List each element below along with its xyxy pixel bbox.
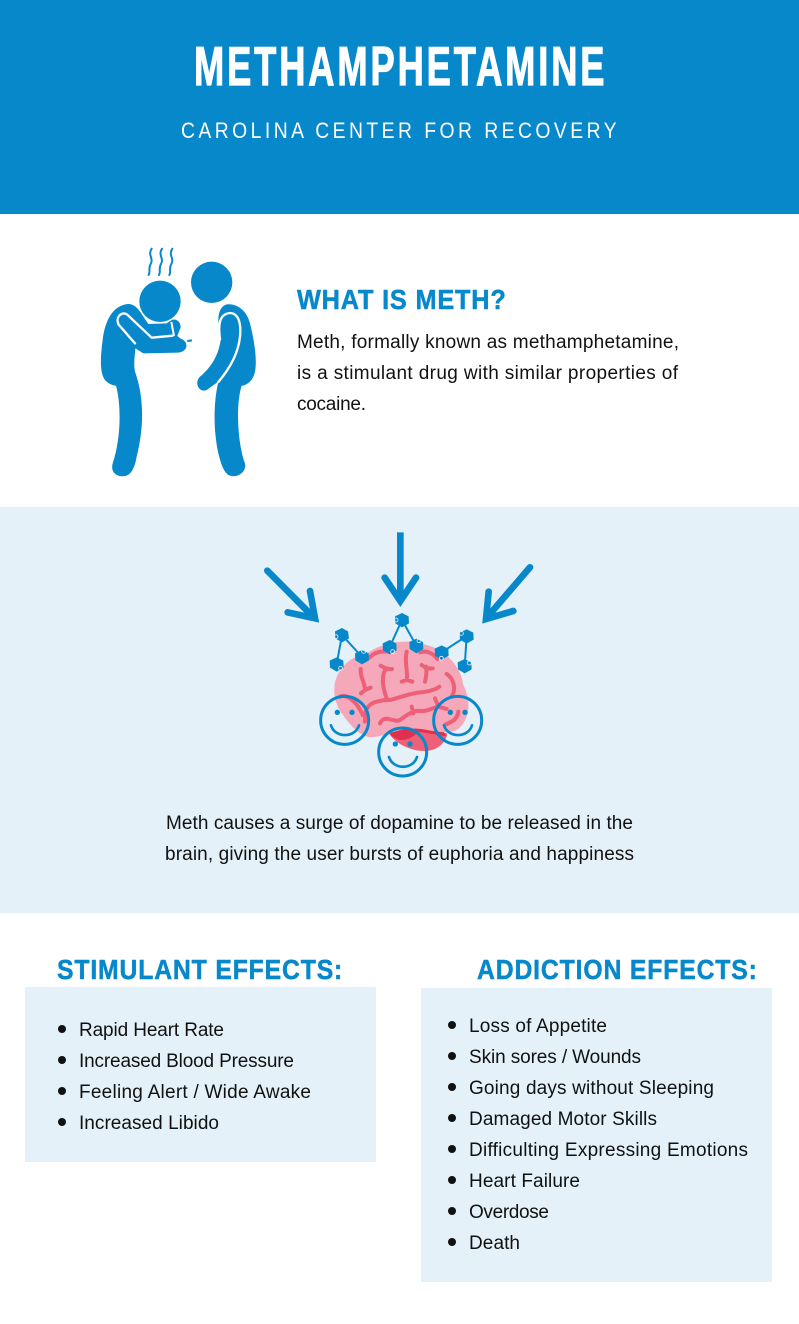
arrow: right bbox=[486, 567, 530, 619]
right person head bbox=[191, 262, 232, 303]
panel: addiction effects bbox=[421, 988, 772, 1282]
pipe bbox=[171, 322, 174, 336]
heading: stimulant effects: STIMULANT EFFECTS: bbox=[57, 954, 342, 985]
brain bbox=[334, 642, 469, 751]
left person body bbox=[101, 304, 186, 476]
heading: addiction effects: ADDICTION EFFECTS: bbox=[477, 954, 757, 985]
title: METHAMPHETAMINE bbox=[194, 35, 605, 97]
panel: addiction effects: Going days without Sleeping bbox=[469, 1078, 714, 1099]
panel: stimulant effects: Feeling Alert / Wide Awake bbox=[79, 1082, 311, 1103]
panel: stimulant effects: Increased Libido bbox=[79, 1113, 219, 1134]
right arm outline bbox=[218, 313, 240, 382]
panel: addiction effects: Damaged Motor Skills bbox=[469, 1109, 657, 1130]
panel: addiction effects: Death bbox=[469, 1233, 520, 1254]
subtitle: CAROLINA CENTER FOR RECOVERY bbox=[181, 119, 617, 143]
heading: what is meth: WHAT IS METH? bbox=[297, 284, 506, 315]
text: meth description: is a stimulant drug with similar properties of bbox=[297, 363, 679, 384]
panel: stimulant effects bbox=[25, 987, 376, 1162]
face: right bbox=[434, 696, 482, 744]
text: meth description: Meth, formally known as methamphetamine, bbox=[297, 332, 679, 353]
text: dopamine caption: Meth causes a surge of dopamine to be released in the bbox=[166, 813, 633, 834]
text: meth description bbox=[297, 332, 679, 415]
icon: two people, one smoking bbox=[101, 249, 256, 476]
panel: addiction effects: Skin sores / Wounds bbox=[469, 1047, 641, 1068]
text: dopamine caption bbox=[165, 813, 634, 865]
left person head bbox=[139, 281, 181, 322]
molecule highlights bbox=[334, 618, 471, 670]
face: left bbox=[321, 696, 369, 744]
panel: header bbox=[0, 0, 799, 214]
arrow: left bbox=[267, 571, 315, 618]
illustration: brain with arrows bbox=[267, 532, 530, 776]
face: bottom bbox=[379, 728, 427, 776]
arrow: center bbox=[390, 532, 410, 600]
molecule bonds bbox=[337, 620, 467, 666]
text: meth description: cocaine. bbox=[297, 394, 366, 415]
panel: what is meth bbox=[101, 249, 679, 476]
panel: addiction effects: Difficulting Expressing Emotions bbox=[469, 1140, 748, 1161]
panel: stimulant effects: Rapid Heart Rate bbox=[79, 1020, 224, 1041]
panel: addiction effects: Heart Failure bbox=[469, 1171, 580, 1192]
panel: stimulant effects: Increased Blood Pressure bbox=[79, 1051, 294, 1072]
panel: addiction effects: Loss of Appetite bbox=[469, 1016, 607, 1037]
panel: dopamine bbox=[0, 507, 799, 913]
text: dopamine caption: brain, giving the user bursts of euphoria and happiness bbox=[165, 844, 634, 865]
right person body bbox=[197, 304, 256, 476]
panel: addiction effects: Overdose bbox=[469, 1202, 549, 1223]
left arm outline bbox=[118, 313, 173, 343]
molecule nodes bbox=[330, 613, 474, 673]
smoke bbox=[149, 249, 172, 275]
